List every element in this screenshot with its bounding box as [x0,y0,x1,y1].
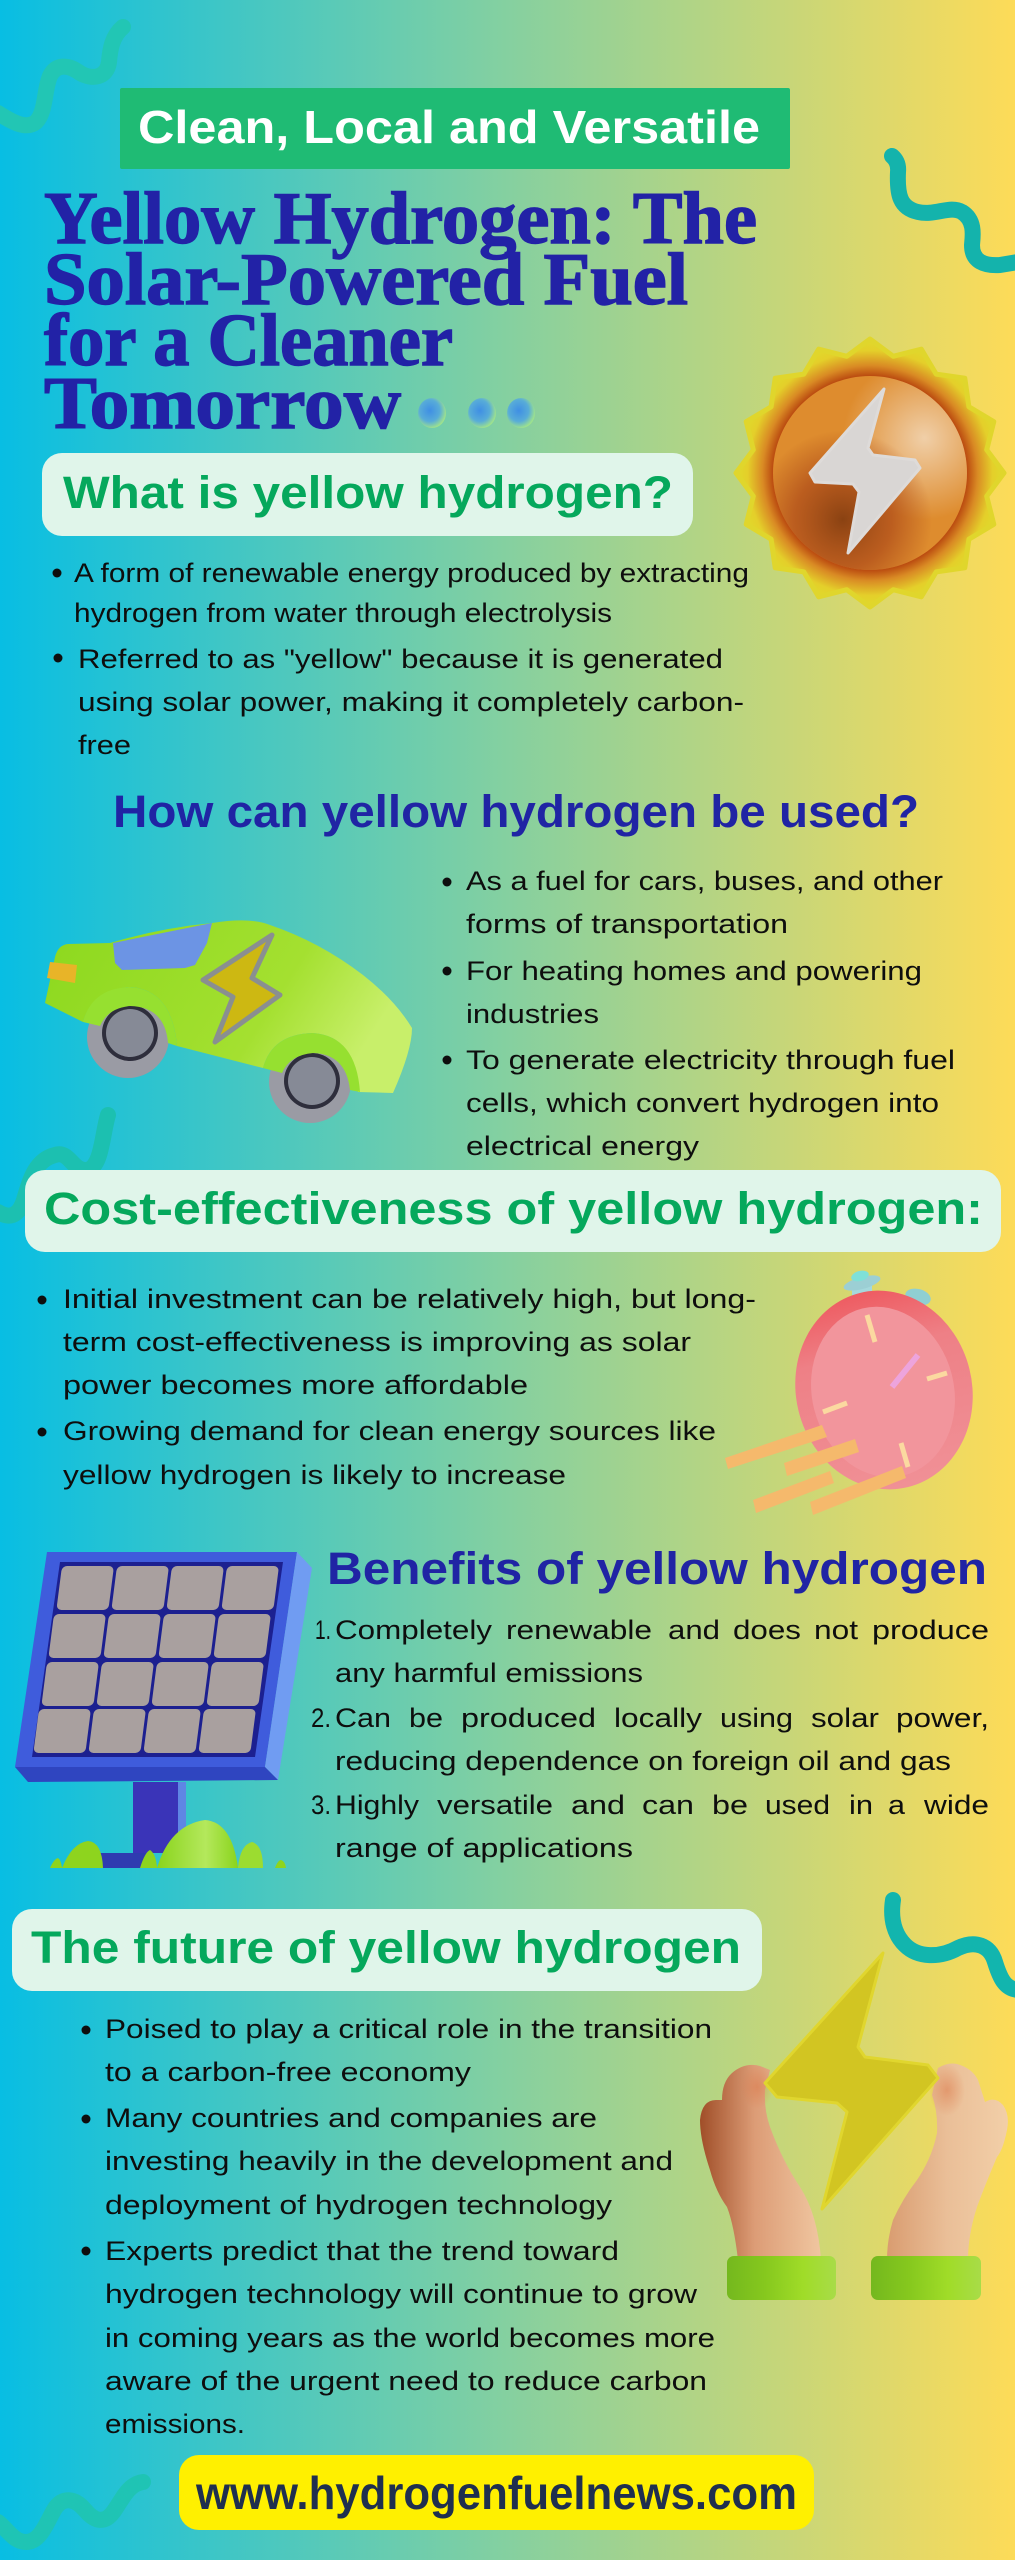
title: Yellow Hydrogen: The [44,178,757,260]
numbered list: benefits: not [814,1615,859,1645]
decoration: bottom-left squiggle [0,2482,143,2542]
decoration: top-right squiggle [892,156,1015,265]
numbered list: benefits: wide [923,1790,989,1820]
bullet list: uses: electrical energy [466,1131,700,1161]
bullet list: future: to a carbon-free economy [105,2057,472,2087]
numbered list: benefits: using [720,1703,793,1733]
bullet list: definition [52,558,749,760]
bullet list: cost: Initial investment can be relatively high, but long- [63,1284,756,1314]
subtitle banner [120,88,790,169]
numbered list: benefits: Highly [335,1790,420,1820]
bullet list: definition: Referred to as "yellow" because it is generated [78,644,723,674]
website footer pill [179,2455,814,2530]
numbered list: benefits: range of applications [335,1833,633,1863]
bullet list: cost: power becomes more affordable [63,1370,528,1400]
numbered list: benefits: 2. [311,1703,331,1733]
bullet list: future [82,2014,715,2439]
numbered list: benefits: 3. [311,1790,331,1820]
bullet list: uses: industries [466,999,599,1029]
bullet list: cost: yellow hydrogen is likely to increase [63,1460,566,1490]
numbered list: benefits: Can [335,1703,391,1733]
bullet list: uses: For heating homes and powering [466,956,922,986]
numbered list: benefits: power, [896,1703,989,1733]
heading: how can yellow hydrogen be used: How can yellow hydrogen be used? [113,786,919,837]
numbered list: benefits: and [668,1615,720,1645]
bullet list: uses: forms of transportation [466,909,788,939]
numbered list: benefits: in [849,1790,873,1820]
bullet list: cost: term cost-effectiveness is improving as solar [63,1327,691,1357]
bullet list: uses: As a fuel for cars, buses, and other [466,866,943,896]
numbered list: benefits: produce [872,1615,989,1645]
decoration: mid-left squiggle [0,1115,108,1216]
title: for a Cleaner [44,300,453,382]
bullet list: future: in coming years as the world becomes more [105,2323,715,2353]
numbered list: benefits: produced [461,1703,596,1733]
numbered list: benefits: used [765,1790,830,1820]
numbered list: benefits: 1. [315,1615,331,1645]
numbered list: benefits: any harmful emissions [335,1658,643,1688]
bullet list: uses [442,866,955,1161]
bullet list: future: hydrogen technology will continue to grow [105,2279,698,2309]
decoration: top-left squiggle [0,27,123,125]
panel: benefits [311,1543,989,1863]
bullet list: uses: cells, which convert hydrogen into [466,1088,939,1118]
bullet list: future: Experts predict that the trend toward [105,2236,619,2266]
numbered list: benefits: be [712,1790,748,1820]
bullet list: cost: Growing demand for clean energy sources like [63,1416,716,1446]
numbered list: benefits: can [642,1790,694,1820]
numbered list: benefits: be [409,1703,443,1733]
numbered list: benefits: Completely [335,1615,493,1645]
bullet list: uses: To generate electricity through fuel [466,1045,955,1075]
bullet list: cost [38,1284,756,1490]
title [44,178,757,445]
decoration: right squiggle [892,1900,1015,1990]
numbered list: benefits: does [733,1615,801,1645]
bullet list: future: Poised to play a critical role in the transition [105,2014,712,2044]
bullet list: future: deployment of hydrogen technology [105,2190,613,2220]
bullet list: definition: using solar power, making it completely carbon- [78,687,744,717]
subtitle banner: Clean, Local and Versatile [138,101,760,153]
panel: what is yellow hydrogen [42,453,749,760]
numbered list: benefits: versatile [437,1790,553,1820]
website footer pill: www.hydrogenfuelnews.com [195,2467,797,2519]
icon: solar panel [15,1552,312,1868]
title: Solar-Powered Fuel [44,239,688,321]
bullet list: definition: A form of renewable energy produced by extracting [74,558,749,588]
numbered list: benefits: renewable [506,1615,652,1645]
bullet list: future: investing heavily in the development and [105,2146,673,2176]
numbered list: benefits: solar [811,1703,879,1733]
numbered list: benefits: and [571,1790,625,1820]
bullet list: future: Many countries and companies are [105,2103,597,2133]
heading: benefits: Benefits of yellow hydrogen [327,1543,987,1594]
bullet list: future: aware of the urgent need to reduce carbon [105,2366,707,2396]
numbered list: benefits: a [888,1790,906,1820]
heading: the future: The future of yellow hydrogen [31,1922,741,1973]
bullet list: future: emissions. [105,2409,245,2439]
heading: the future [12,1909,762,1991]
decorative dots [418,398,535,428]
numbered list: benefits: locally [614,1703,703,1733]
numbered list: benefits: reducing dependence on foreign oil and gas [335,1746,951,1776]
icon: green electric car [45,920,412,1123]
icon: speeding stopwatch [725,1269,994,1515]
bullet list: definition: free [78,730,131,760]
numbered list: benefits [311,1615,989,1863]
heading: cost-effectiveness [25,1170,1001,1252]
bullet list: definition: hydrogen from water through electrolysis [74,598,612,628]
heading: what is yellow hydrogen [42,453,693,536]
title: Tomorrow [44,363,402,445]
heading: cost-effectiveness: Cost-effectiveness of yellow hydrogen: [44,1183,983,1234]
icon: sun with lightning bolt [736,339,1004,607]
heading: what is yellow hydrogen: What is yellow hydrogen? [63,467,673,518]
icon: hands holding lightning bolt [700,1953,1008,2300]
